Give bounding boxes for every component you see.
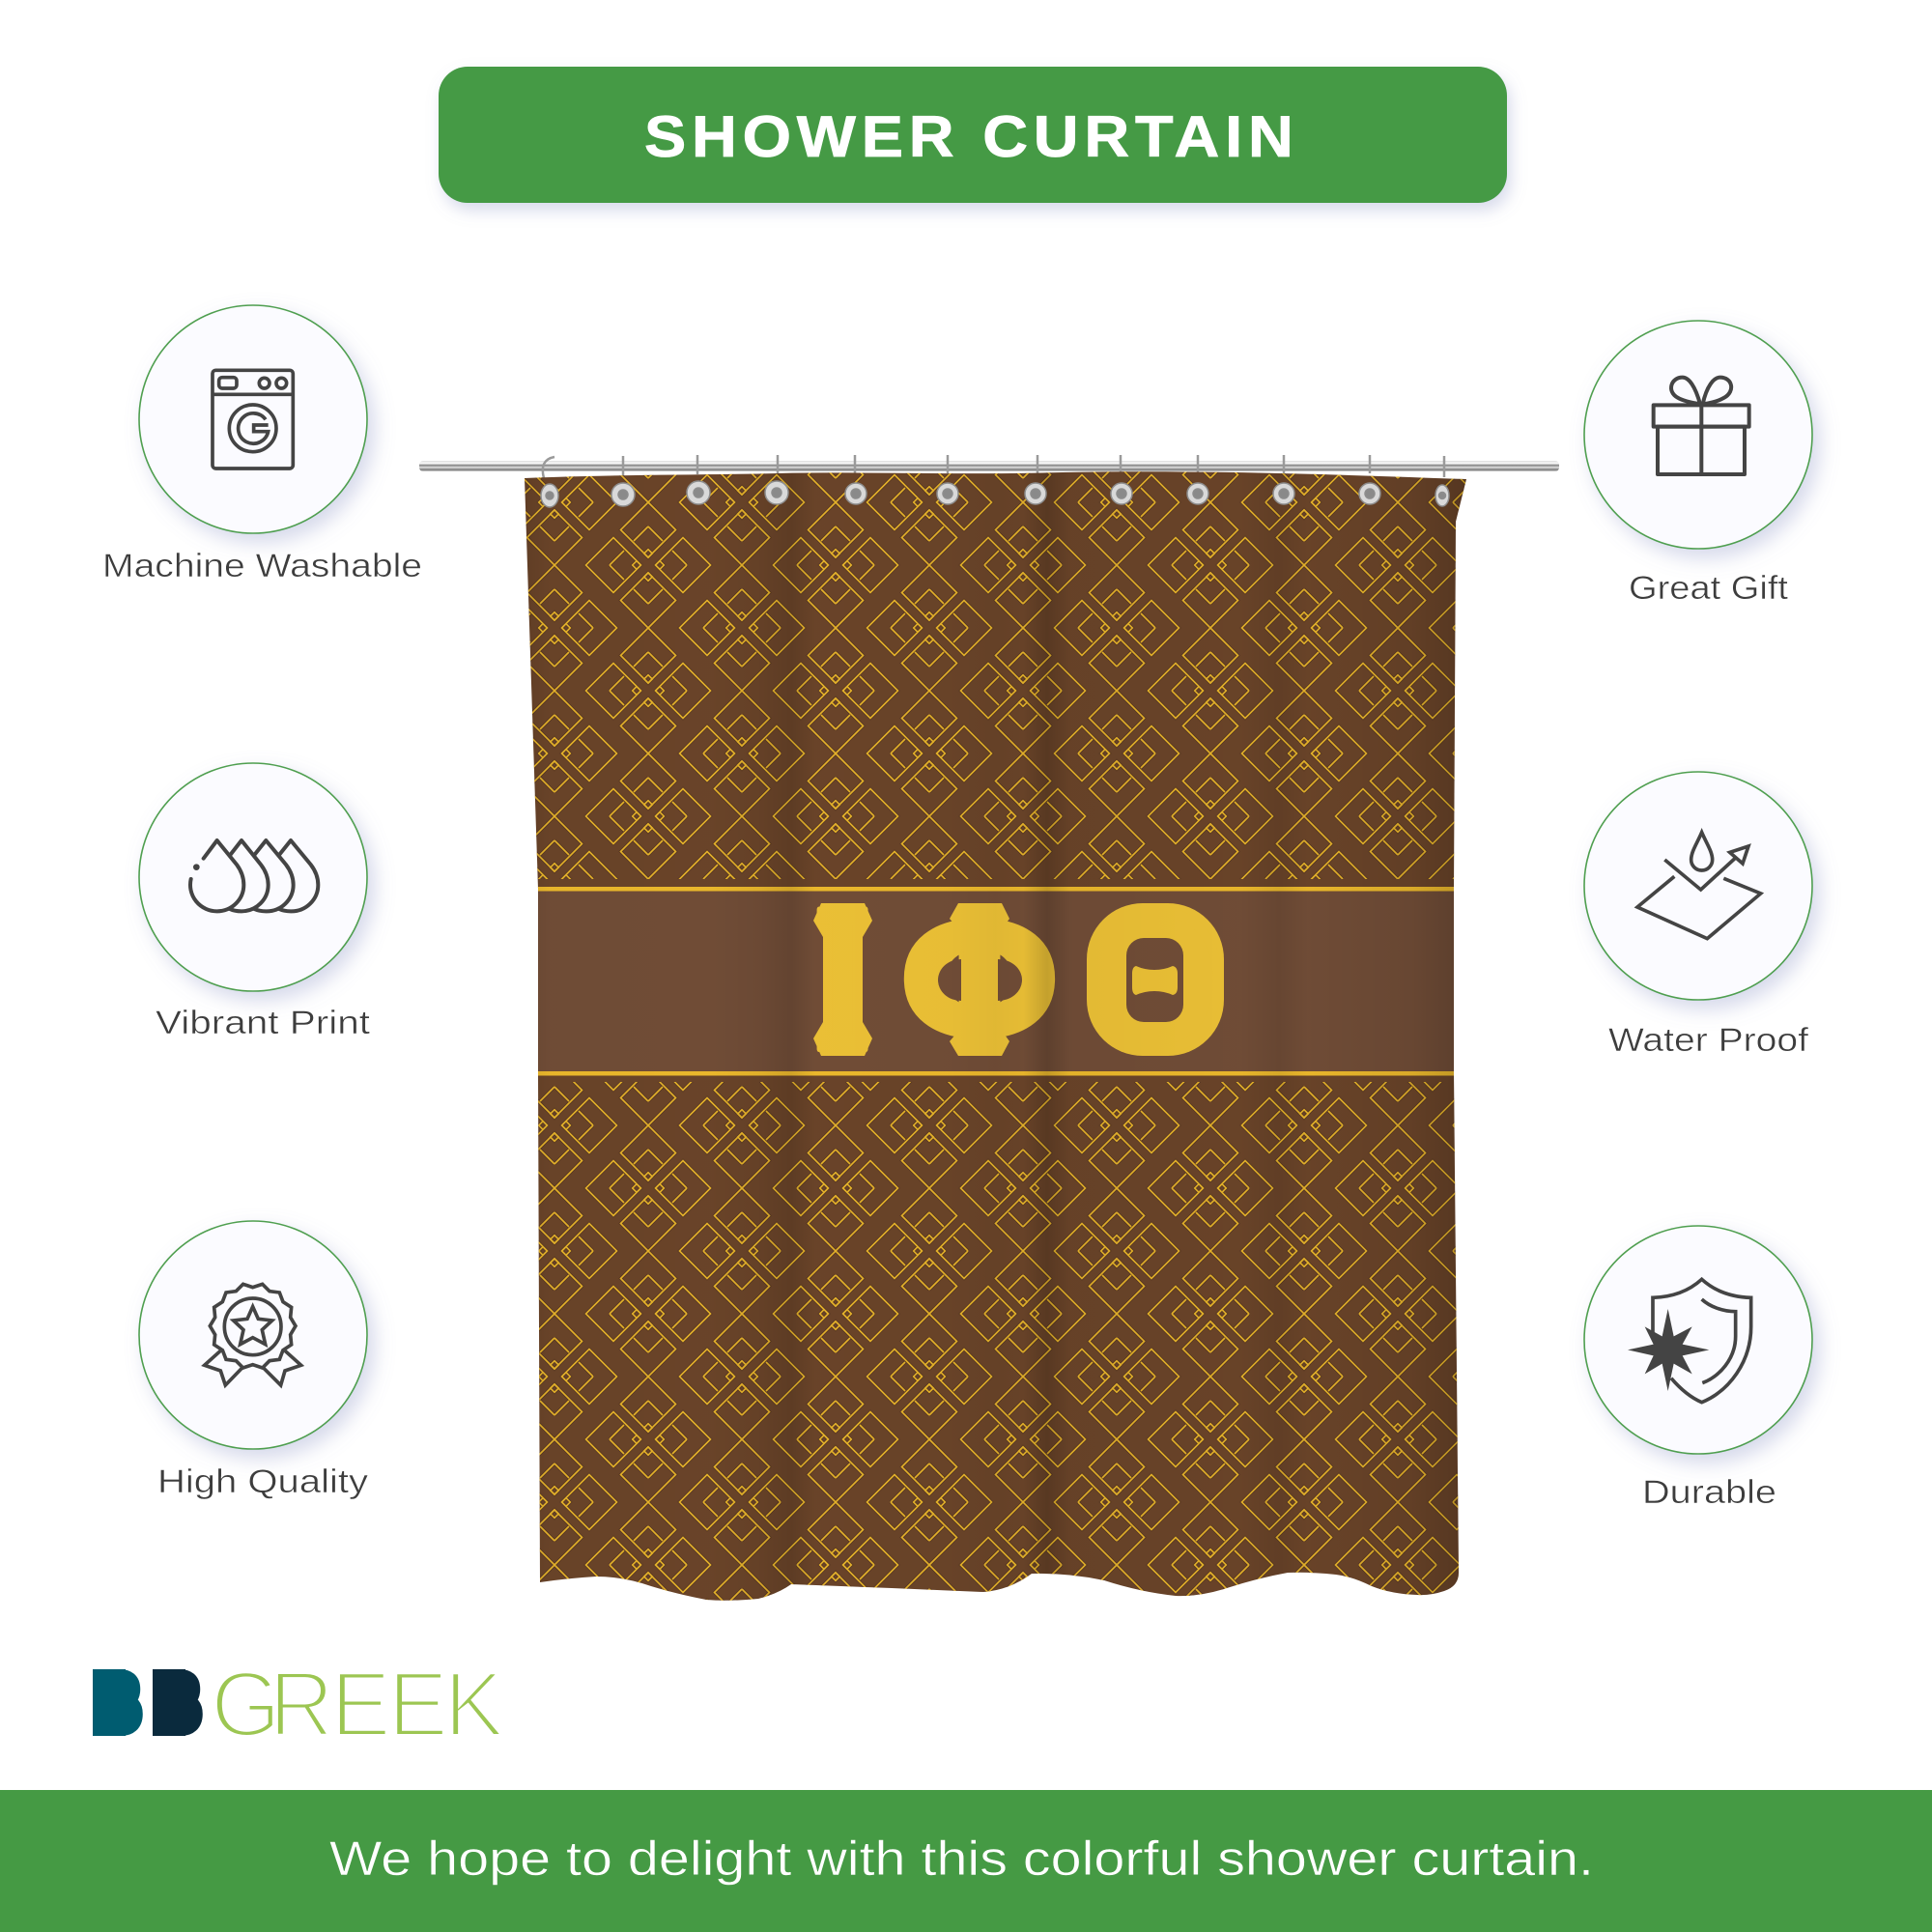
fold shading [512,464,1478,1613]
label: High Quality [157,1463,368,1500]
feature: High Quality [139,1221,368,1500]
icon: rosette badge [205,1284,301,1385]
label: Durable [1642,1474,1776,1511]
title text: SHOWER CURTAIN [644,104,1293,169]
feature: Water Proof [1584,772,1812,1059]
letter theta [1087,903,1224,1056]
curtain rod [419,461,1559,471]
shower curtain [419,455,1559,1613]
feature: Machine Washable [102,305,422,584]
icon: gift box [1654,378,1749,474]
feature: Vibrant Print [139,763,371,1041]
letter phi: Φ [896,867,1063,1098]
title banner [439,67,1507,203]
icon: shield with impact star [1628,1279,1751,1403]
letter iota [813,903,872,1056]
label: Water Proof [1608,1022,1809,1059]
letter phi [904,903,1055,1056]
icon: washing machine [213,370,293,469]
band [512,891,1478,1071]
icon: drops [190,840,318,911]
label: Machine Washable [102,548,422,584]
hooks [543,455,1444,478]
icon: water repellent surface [1637,833,1761,939]
letter theta: Θ [1085,876,1226,1091]
logo: BB GREEK: GREEK [211,1653,504,1756]
footer text: We hope to delight with this colorful shower curtain. [329,1832,1594,1886]
label: Vibrant Print [156,1005,371,1041]
letter iota: Ι [812,869,872,1094]
feature: Great Gift [1584,321,1812,607]
curtain fabric [512,464,1478,1613]
feature: Durable [1584,1226,1812,1511]
logo: BB GREEK: B [96,1660,140,1747]
Greek letters [813,903,1224,1056]
label: Great Gift [1629,570,1789,607]
grommets [541,481,1449,507]
logo: BB GREEK: B [156,1660,200,1747]
footer band [0,1790,1932,1932]
